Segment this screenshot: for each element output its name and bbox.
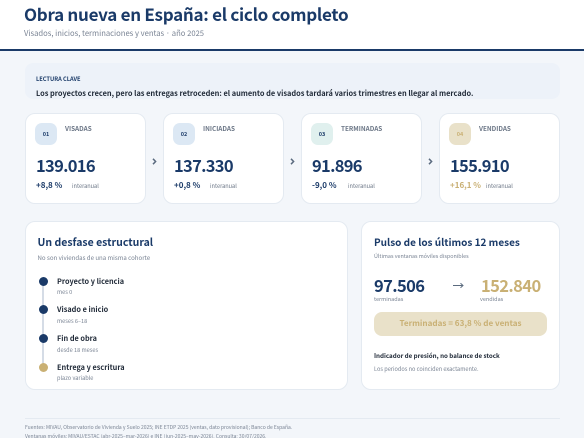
card: vendidas <box>439 113 560 204</box>
card: visadas: 139.016 <box>36 153 95 177</box>
card: visadas: VISADAS <box>65 124 92 133</box>
timeline <box>39 277 125 382</box>
card: terminadas: -9,0 % <box>312 180 337 191</box>
sources: Fuentes: MIVAU, Observatorio de Vivienda y Suelo 2025; INE ETDP 2025 (ventas, dato provisional); Banco de España. <box>25 424 292 431</box>
step 3: desde 18 meses <box>57 346 98 354</box>
step 2: Visado e inicio <box>57 305 108 315</box>
header <box>0 0 584 51</box>
panel subtitle: No son viviendas de una misma cohorte <box>38 253 150 262</box>
card: visadas: 01 <box>43 130 49 138</box>
panel heading: Un desfase estructural <box>38 235 153 250</box>
arrow <box>453 282 464 288</box>
card: visadas <box>25 113 146 204</box>
arrow 1 <box>152 158 156 165</box>
step 4 <box>39 363 125 382</box>
card: terminadas: TERMINADAS <box>341 124 382 133</box>
panel subtitle: Últimas ventanas móviles disponibles <box>374 252 469 260</box>
card: iniciadas: 137.330 <box>174 153 233 177</box>
card: vendidas: interanual <box>486 182 513 190</box>
panel: pulso <box>361 221 560 390</box>
title: Obra nueva en España: el ciclo completo <box>24 1 348 26</box>
arrow 2 <box>290 158 294 165</box>
card: terminadas <box>301 113 422 204</box>
step 3 <box>39 334 98 354</box>
arrow 3 <box>428 158 432 165</box>
step 1 <box>39 277 124 296</box>
card: vendidas: VENDIDAS <box>479 124 511 133</box>
step 4: Entrega y escritura <box>57 363 125 373</box>
card: iniciadas: interanual <box>210 182 237 190</box>
step 2: meses 6–18 <box>57 317 87 325</box>
note text: Los periodos no coinciden exactamente. <box>374 365 479 373</box>
card: terminadas: 91.896 <box>312 153 362 177</box>
step 3: Fin de obra <box>57 334 97 344</box>
card: iniciadas <box>163 113 284 204</box>
metric: terminadas: 97.506 <box>374 273 424 297</box>
card: iniciadas: +0,8 % <box>174 180 200 191</box>
panel heading: Pulso de los últimos 12 meses <box>374 234 520 249</box>
step 1: mes 0 <box>57 288 72 296</box>
callout label: LECTURA CLAVE <box>36 74 81 83</box>
card: vendidas: 155.910 <box>450 153 509 177</box>
card: vendidas: +16,1 % <box>450 180 481 191</box>
ratio pill <box>374 312 547 336</box>
card: visadas: +8,8 % <box>36 180 62 191</box>
card: terminadas: interanual <box>348 182 375 190</box>
step 4: plazo variable <box>57 374 93 382</box>
step 2 <box>39 305 108 325</box>
footer <box>25 418 560 438</box>
card: iniciadas: INICIADAS <box>203 124 235 133</box>
card: vendidas: 04 <box>457 130 463 138</box>
card: terminadas: 03 <box>319 130 325 138</box>
metric: vendidas: vendidas <box>480 295 503 303</box>
card: visadas: interanual <box>72 182 99 190</box>
ratio pill: Terminadas = 63,8 % de ventas <box>400 318 521 329</box>
step 1: Proyecto y licencia <box>57 277 124 287</box>
metric: vendidas: 152.840 <box>481 273 541 297</box>
subtitle: Visados, inicios, terminaciones y ventas · año 2025 <box>24 28 204 38</box>
panel: desfase estructural <box>25 221 348 390</box>
callout: lectura clave <box>25 63 560 99</box>
callout text: Los proyectos crecen, pero las entregas retroceden: el aumento de visados tardará varios trimestres en llegar al mercado. <box>36 88 473 99</box>
metric: terminadas: terminadas <box>374 295 403 303</box>
card: iniciadas: 02 <box>181 130 187 138</box>
note heading: Indicador de presión, no balance de stock <box>374 351 500 360</box>
